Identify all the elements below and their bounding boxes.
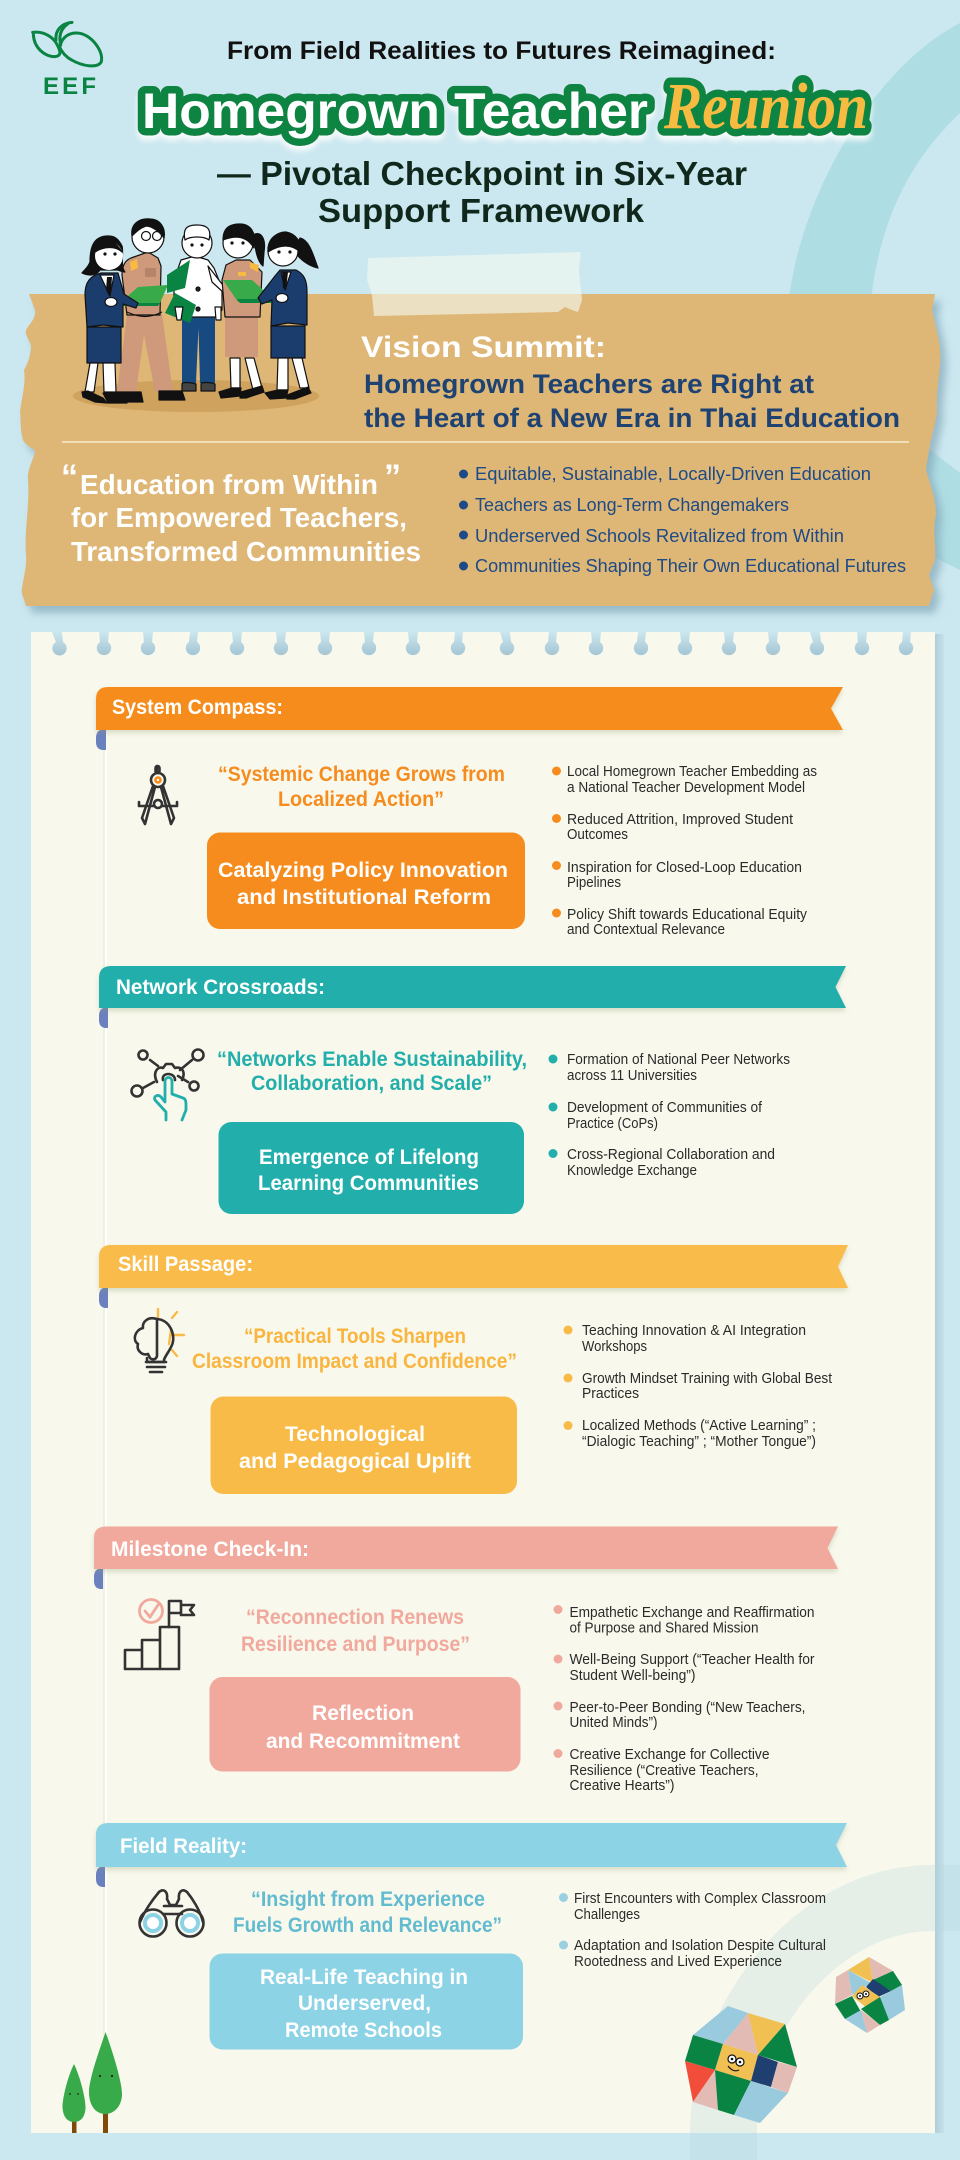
outcome box [210, 1396, 517, 1494]
quote [217, 1048, 527, 1095]
bullet list: “Dialogic Teaching” ; “Mother Tongue”) [582, 1433, 816, 1450]
text: education from within: for Empowered Teachers, [71, 502, 407, 533]
logo: EEF: EEF [43, 73, 96, 100]
icon: binoculars [140, 1890, 204, 1936]
bullet list: Policy Shift towards Educational Equity [567, 906, 807, 923]
bullet list: Student Well-being”) [570, 1667, 696, 1684]
binder holes [52, 632, 913, 655]
illustration: small polyhedron character [835, 1957, 905, 2033]
teacher 5 navy suit [258, 232, 318, 399]
quote: “Practical Tools Sharpen [244, 1325, 466, 1348]
outcome box [210, 1677, 520, 1772]
list: principles: Equitable, Sustainable, Locally-Driven Education [475, 464, 871, 484]
ribbon: Network Crossroads: [116, 976, 325, 999]
bullet list: Empathetic Exchange and Reaffirmation [570, 1604, 814, 1621]
bullet list: Adaptation and Isolation Despite Cultural [574, 1937, 826, 1954]
text: education from within: Transformed Communities [71, 536, 421, 567]
teacher 1 navy suit [82, 236, 138, 403]
ribbon [96, 687, 843, 750]
bullet list [548, 1051, 790, 1179]
bullet list [559, 1890, 826, 1970]
bullet list: Local Homegrown Teacher Embedding as [567, 763, 817, 780]
bullet list: Localized Methods (“Active Learning” ; [582, 1417, 816, 1434]
logo: EEF [33, 22, 102, 100]
icon: network gear hand [132, 1050, 204, 1120]
bullet list: across 11 Universities [567, 1067, 697, 1084]
ribbon [99, 1245, 848, 1308]
illustration: five teachers [73, 219, 319, 412]
bullet list: Rootedness and Lived Experience [574, 1953, 782, 1970]
panel: notebook paper [31, 632, 944, 2133]
section: Field Reality [96, 1823, 847, 2050]
ribbon: Field Reality: [120, 1835, 247, 1858]
section: Milestone Check-In [94, 1526, 838, 1794]
bullet list: Reduced Attrition, Improved Student [567, 811, 794, 828]
heading: kicker: From Field Realities to Futures Reimagined: [227, 37, 776, 65]
outcome box: Remote Schools [285, 2019, 442, 2042]
quote: “Systemic Change Grows from [218, 763, 505, 786]
bullet list: Inspiration for Closed-Loop Education [567, 859, 802, 876]
decorative arc top right [789, 23, 960, 300]
bullet list: United Minds”) [570, 1714, 658, 1731]
icon: drafting compass [139, 766, 177, 824]
bullet list: and Contextual Relevance [567, 921, 725, 938]
bullet list: Pipelines [567, 874, 621, 891]
icon: milestone chart and flag [125, 1600, 194, 1669]
text: education from within: ” [384, 458, 401, 496]
bullet list: Practices [582, 1385, 639, 1402]
outcome box [210, 1954, 523, 2050]
outcome box: Reflection [312, 1702, 414, 1725]
section: Skill Passage [99, 1245, 848, 1494]
text: education from within [61, 458, 421, 567]
illustration: big polyhedron character [685, 2006, 797, 2123]
tape [367, 252, 582, 316]
bullet list: Formation of National Peer Networks [567, 1051, 790, 1068]
quote: Classroom Impact and Confidence” [192, 1350, 517, 1373]
outcome box: and Institutional Reform [237, 886, 491, 909]
ribbon [94, 1526, 838, 1589]
quote: Localized Action” [278, 788, 444, 811]
list: principles: Underserved Schools Revitalized from Within [475, 526, 844, 546]
bullet list: a National Teacher Development Model [567, 779, 805, 796]
list: principles: Teachers as Long-Term Changemakers [475, 495, 789, 515]
quote: Fuels Growth and Relevance” [233, 1914, 502, 1937]
outcome box: Underserved, [298, 1992, 431, 2015]
outcome box [207, 832, 525, 929]
bullet list: Knowledge Exchange [567, 1162, 697, 1179]
text: vision summit: Vision Summit: [361, 331, 606, 364]
panel: vision summit [20, 219, 940, 606]
bullet list: Development of Communities of [567, 1099, 763, 1116]
bullet list [552, 763, 817, 938]
outcome box: Catalyzing Policy Innovation [218, 859, 508, 882]
quote [218, 763, 505, 811]
bullet list: Resilience (“Creative Teachers, [570, 1762, 758, 1779]
teacher 2 tan uniform [115, 219, 185, 402]
decorative arc bottom right [690, 1865, 960, 2160]
text: education from within: Education from Within [80, 469, 378, 500]
outcome box: and Recommitment [266, 1730, 460, 1753]
quote: “Networks Enable Sustainability, [217, 1048, 527, 1071]
bullet list: of Purpose and Shared Mission [570, 1620, 758, 1636]
ribbon [99, 966, 846, 1028]
list: principles: Communities Shaping Their Own Educational Futures [475, 556, 906, 576]
section: Network Crossroads [99, 966, 846, 1214]
text: vision statement [364, 369, 900, 433]
bullet list: Practice (CoPs) [567, 1115, 658, 1132]
outcome box [218, 1122, 524, 1214]
subtitle: — Pivotal Checkpoint in Six-Year [217, 155, 747, 192]
bullet list: First Encounters with Complex Classroom [574, 1890, 826, 1907]
icon: brain lightbulb [135, 1309, 184, 1372]
ribbon: Milestone Check-In: [111, 1538, 309, 1561]
subtitle [217, 155, 747, 229]
ribbon: Skill Passage: [118, 1253, 253, 1276]
bullet list: Teaching Innovation & AI Integration [582, 1322, 806, 1339]
title: Homegrown Teacher Reunion: Reunion [663, 70, 868, 143]
outcome box: and Pedagogical Uplift [239, 1450, 471, 1473]
outcome box: Emergence of Lifelong [259, 1146, 479, 1169]
illustration: trees [62, 2032, 122, 2133]
bullet list: Growth Mindset Training with Global Best [582, 1370, 833, 1387]
title: Homegrown Teacher Reunion [142, 70, 868, 143]
quote: Resilience and Purpose” [241, 1633, 470, 1656]
teacher 3 white shirt [165, 225, 228, 391]
bullet list: Outcomes [567, 826, 628, 843]
list: principles [459, 464, 906, 576]
quote [241, 1606, 470, 1656]
bullet list: Well-Being Support (“Teacher Health for [570, 1651, 814, 1668]
bullet list [554, 1604, 814, 1794]
outcome box: Technological [285, 1423, 425, 1446]
ribbon [96, 1823, 847, 1887]
bullet list: Creative Exchange for Collective [570, 1746, 770, 1763]
title: Homegrown Teacher Reunion: Homegrown Teacher [142, 83, 648, 139]
bullet list: Cross-Regional Collaboration and [567, 1146, 775, 1163]
teacher 4 tan with skirt [219, 224, 272, 398]
quote: Collaboration, and Scale” [251, 1072, 492, 1095]
bullet list: Creative Hearts”) [570, 1777, 674, 1794]
quote [233, 1888, 502, 1937]
bullet list: Challenges [574, 1906, 640, 1923]
bullet list: Peer-to-Peer Bonding (“New Teachers, [570, 1699, 806, 1716]
section: System Compass [96, 687, 843, 938]
text: vision statement: the Heart of a New Era in Thai Education [364, 403, 900, 433]
subtitle: Support Framework [318, 192, 645, 229]
text: vision statement: Homegrown Teachers are Right at [364, 369, 814, 399]
ribbon: System Compass: [112, 696, 283, 719]
quote: “Insight from Experience [251, 1888, 485, 1911]
bullet list [564, 1322, 833, 1450]
quote: “Reconnection Renews [246, 1606, 464, 1629]
outcome box: Learning Communities [258, 1172, 479, 1195]
outcome box: Real-Life Teaching in [260, 1966, 468, 1989]
text: education from within: “ [61, 458, 78, 496]
quote [192, 1325, 517, 1373]
bullet list: Workshops [582, 1338, 647, 1355]
